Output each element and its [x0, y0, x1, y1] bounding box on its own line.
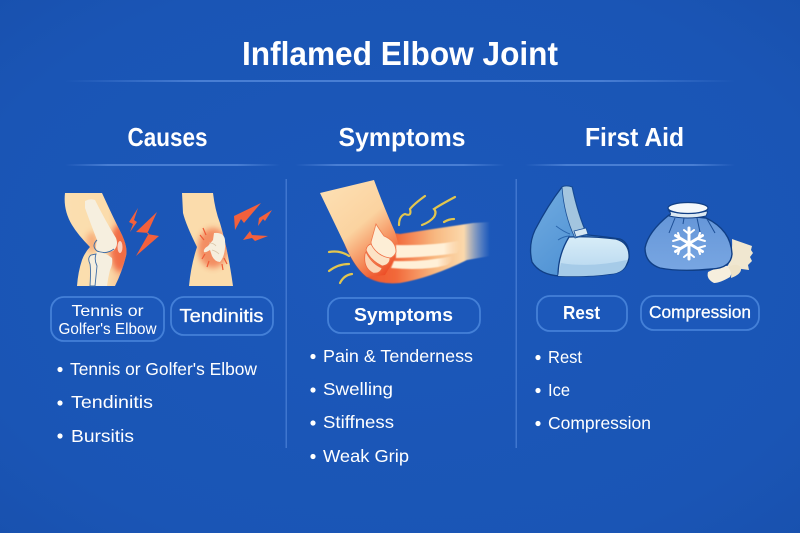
list: causes	[57, 359, 257, 446]
icon: ice bag	[645, 202, 732, 270]
pill: compression: Compression	[649, 302, 751, 322]
list: causes: Tendinitis	[71, 392, 153, 412]
icon: bandage roll	[708, 239, 753, 283]
list: symptoms: Pain & Tenderness	[323, 346, 473, 366]
heading: causes: Causes	[128, 122, 208, 152]
list: symptoms	[310, 346, 473, 466]
icon: yellow pain marks	[329, 196, 455, 283]
icon: tendinitis arm	[182, 193, 233, 286]
icon: tendinitis pain bolts	[234, 203, 272, 241]
pill: rest: Rest	[563, 303, 600, 323]
list: causes: Tennis or Golfer's Elbow	[70, 359, 257, 379]
list: symptoms: Stiffness	[323, 412, 394, 432]
pill: compression	[641, 296, 759, 330]
heading: first aid: First Aid	[585, 122, 684, 152]
pill: symptoms	[328, 298, 480, 333]
pill: rest	[537, 296, 627, 331]
list: first aid: Compression	[548, 413, 651, 433]
icon: arm sling	[531, 186, 629, 276]
list: first aid: Rest	[548, 347, 582, 367]
heading: symptoms: Symptoms	[338, 122, 466, 152]
pill: tendinitis	[171, 297, 273, 335]
list: first aid	[535, 347, 651, 433]
list: symptoms: Weak Grip	[323, 446, 409, 466]
pill: tennis or golfer's elbow: Tennis or	[72, 303, 144, 320]
pill: tendinitis: Tendinitis	[180, 306, 264, 326]
icon: elbow joint with bones	[65, 193, 130, 286]
icon: inflamed elbow	[320, 180, 490, 283]
icon: lightning bolts	[129, 208, 159, 256]
pill: tennis or golfer's elbow: Golfer's Elbow	[58, 321, 157, 338]
list: symptoms: Swelling	[323, 379, 393, 399]
list: first aid: Ice	[548, 380, 570, 400]
pill: tennis or golfer's elbow	[51, 297, 164, 341]
title: Inflamed Elbow Joint	[242, 35, 558, 72]
list: causes: Bursitis	[71, 426, 134, 446]
pill: symptoms: Symptoms	[354, 305, 453, 325]
